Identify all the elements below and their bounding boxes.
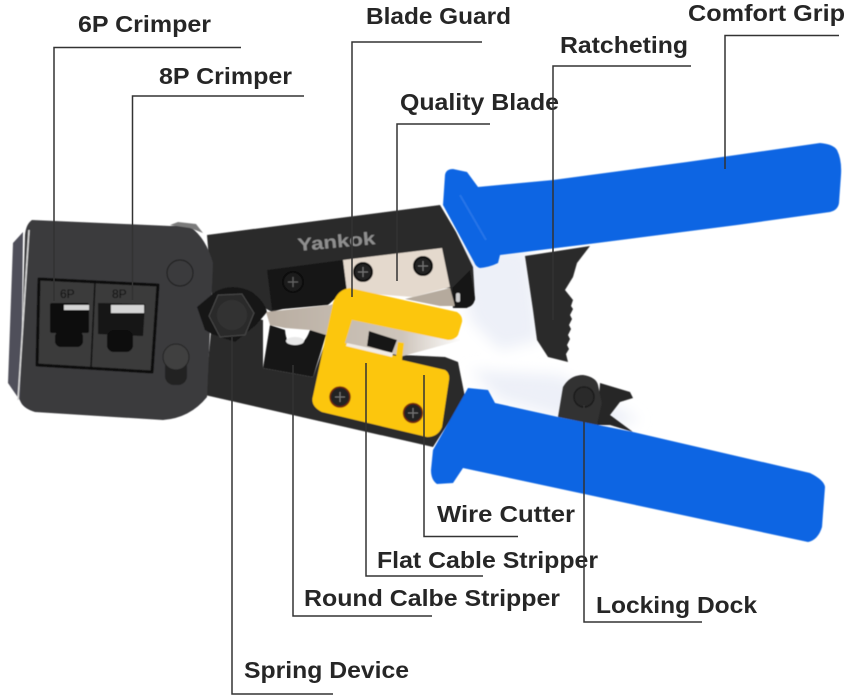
- label: Flat Cable Stripper: [366, 363, 598, 576]
- stripper gap: [266, 300, 462, 356]
- label: Blade Guard: [352, 3, 511, 297]
- tip lug: [452, 270, 475, 308]
- label: Wire Cutter: [424, 375, 575, 536]
- yellow blade guard: [312, 288, 462, 437]
- upper blue handle: [443, 143, 841, 268]
- 8P port: 8P: [112, 287, 127, 301]
- label: Ratcheting: Ratcheting: [560, 32, 688, 58]
- brand name: Yankok: [297, 228, 377, 255]
- label: Ratcheting: [553, 32, 691, 320]
- upper jaw arm: [207, 205, 475, 312]
- upper handle collar highlight: [460, 195, 486, 240]
- locking dock: [558, 375, 633, 432]
- label: Spring Device: [232, 336, 409, 694]
- pivot bolt: [197, 287, 267, 342]
- label: Comfort Grip: Comfort Grip: [688, 0, 845, 26]
- crimping tool illustration: [8, 143, 841, 542]
- label: Flat Cable Stripper: Flat Cable Stripper: [377, 547, 598, 573]
- label: Quality Blade: Quality Blade: [400, 89, 559, 115]
- lower jaw arm: [205, 310, 465, 447]
- label: 6P Crimper: [54, 11, 241, 301]
- label: Blade Guard: Blade Guard: [366, 3, 511, 29]
- screw upper jaw: [283, 272, 303, 292]
- label: 8P Crimper: [132, 63, 304, 300]
- 6P port: 6P: [60, 287, 75, 301]
- label: Locking Dock: Locking Dock: [596, 592, 757, 618]
- ratchet bar: [525, 246, 590, 362]
- label: Comfort Grip: [688, 0, 845, 169]
- label: Spring Device: Spring Device: [244, 657, 409, 683]
- head housing: [8, 220, 213, 420]
- lower blue handle: [431, 388, 825, 542]
- label: 8P Crimper: 8P Crimper: [159, 63, 292, 89]
- blade screw right: [414, 257, 432, 275]
- port frame: [37, 279, 158, 372]
- label: Wire Cutter: Wire Cutter: [437, 501, 575, 527]
- guard window slider: [367, 331, 397, 353]
- label: Round Calbe Stripper: [293, 365, 560, 616]
- round cable stripper jaw: [263, 325, 326, 377]
- quality blade: [343, 248, 455, 306]
- blade screw left: [354, 263, 372, 281]
- blade guard mount plate: [267, 260, 347, 310]
- soft shadow: [455, 240, 640, 430]
- label: Locking Dock: [584, 405, 757, 622]
- label: Quality Blade: [397, 89, 559, 281]
- guard screw left: [330, 387, 350, 407]
- guard screw right: [404, 404, 422, 422]
- label: 6P Crimper: 6P Crimper: [78, 11, 211, 37]
- label: Round Calbe Stripper: Round Calbe Stripper: [304, 585, 560, 611]
